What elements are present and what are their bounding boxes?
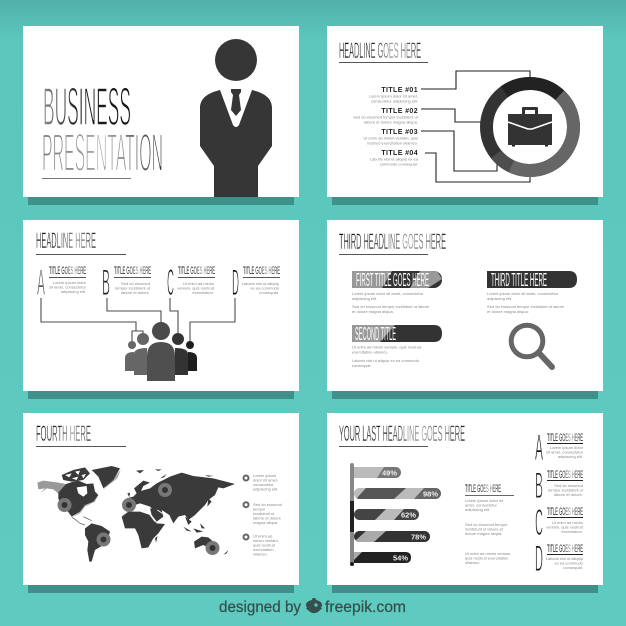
legend item 2: tempor — [253, 506, 266, 512]
connector lines — [421, 71, 530, 182]
title block 4: commodo consequat. — [380, 162, 418, 166]
title block 4: Laboris nisi ut aliquip ex ea — [370, 156, 419, 162]
legend item 2: magna aliqua. — [253, 520, 278, 525]
center text block: quis nostrud exercitation — [465, 556, 508, 560]
item C: Ut enim ad minim — [183, 281, 215, 286]
text: second title body: exercitation ullamco. — [352, 350, 388, 354]
footer credit — [219, 598, 406, 616]
donut chart — [486, 83, 574, 170]
panel: third headline — [327, 220, 603, 399]
bar 49%: 49% — [382, 468, 397, 478]
title block 1: consectetur adipiscing elit. — [371, 98, 418, 104]
right item A: sit amet, consectetur — [546, 450, 584, 454]
panel: headline team: TITLE GOES HERE — [178, 265, 215, 277]
label: second title — [352, 324, 442, 344]
title block 1: Lorem ipsum dolor sit amet, — [369, 94, 418, 98]
right item C: veniam, quis nostrud — [546, 524, 583, 530]
axis — [350, 463, 354, 566]
legend item 1: consectetur — [253, 482, 274, 487]
title block 3 — [363, 129, 418, 146]
center text block — [465, 483, 514, 565]
item D: D — [232, 262, 239, 303]
panel: headline donut — [327, 26, 603, 205]
panel: fourth map: FOURTH HERE — [36, 421, 91, 446]
right item D: Laboris nisi ut aliquip — [546, 556, 584, 561]
text: third title body: et dolore magna aliqua. — [487, 309, 529, 314]
title block 2 — [353, 108, 419, 124]
icon: briefcase — [508, 107, 552, 146]
bar 98%: 98% — [423, 490, 438, 498]
panel: fourth map — [23, 413, 299, 593]
right item B: B — [535, 465, 543, 506]
title block 2: labore et dolore magna aliqua. — [364, 120, 418, 124]
item B: Sed do eiusmod — [121, 281, 150, 286]
bar 54%: 54% — [393, 554, 408, 562]
icon: freepik logo — [306, 598, 322, 613]
legend item 3: Ut enim ad — [253, 534, 272, 538]
right item D: D — [535, 538, 543, 579]
legend item 2: incididunt ut — [253, 511, 275, 516]
item B: B — [102, 262, 110, 303]
center text block: Lorem ipsum dolor sit — [465, 498, 504, 503]
right item D — [535, 538, 584, 579]
panel: business presentation cover: BUSINESS — [43, 77, 131, 137]
legend item 2 — [244, 502, 282, 525]
center text block: adipiscing elit. — [465, 507, 490, 512]
title block 3: nostrud exercitation ullamco. — [367, 140, 418, 146]
title block 1: TITLE #01 — [381, 87, 418, 94]
item B — [102, 262, 151, 303]
title block 4 — [370, 150, 419, 166]
text: second title body: Ut enim ad minim veniam, quis nostrud — [352, 344, 421, 350]
title block 4: TITLE #04 — [381, 150, 418, 157]
connector lines — [41, 298, 235, 341]
panel: headline team — [23, 220, 299, 399]
right item C: C — [535, 502, 543, 543]
right item A: Lorem ipsum dolor — [550, 445, 584, 450]
text: second title body: Laboris nisi ut aliquip ex ea commodo — [352, 358, 420, 363]
item D — [232, 262, 280, 303]
icon: magnifier — [511, 325, 552, 367]
center text block: ullamco. — [465, 560, 480, 565]
item C — [167, 262, 215, 303]
panel: third headline: FIRST TITLE GOES HERE — [356, 270, 429, 290]
text: third title body: Lorem ipsum dolor sit amet, consectetur — [487, 291, 559, 296]
text: first title body: adipiscing elit. — [352, 296, 377, 301]
center text block: amet, consectetur — [465, 502, 497, 508]
text: second title body — [352, 344, 421, 368]
right item B: tempor incididunt ut — [548, 488, 584, 492]
title block 1 — [369, 87, 418, 104]
legend item 1: dolor sit amet, — [253, 478, 278, 482]
item A: Lorem ipsum dolor — [53, 280, 87, 285]
item C: veniam, quis nostrud — [177, 286, 214, 290]
panel: business presentation cover — [23, 26, 299, 205]
legend item 2: labore et dolore — [253, 516, 282, 520]
center text block: dolore magna aliqua. — [465, 531, 502, 536]
panel: headline team: TITLE GOES HERE — [114, 265, 151, 277]
text: third title body — [487, 291, 565, 314]
right item A: A — [535, 427, 543, 468]
panel: headline team: HEADLINE HERE — [36, 228, 96, 253]
legend item 1: Lorem ipsum — [253, 473, 277, 478]
legend item 3: quis nostrud — [253, 542, 275, 548]
legend item 1 — [244, 473, 278, 492]
footer credit: freepik.com — [325, 599, 406, 616]
legend item 3: exercitation — [253, 547, 273, 552]
map markers — [60, 485, 218, 553]
label: second title: SECOND TITLE — [355, 324, 396, 344]
text: second title body: consequat. — [352, 363, 372, 368]
panel: last headline chart — [327, 413, 603, 593]
map: americas — [37, 466, 121, 562]
right item C — [535, 502, 584, 543]
item A: sit amet, consectetur — [49, 284, 87, 290]
right item A — [535, 427, 584, 468]
panel: headline donut: HEADLINE GOES HERE — [339, 38, 421, 63]
text: first title body: Lorem ipsum dolor sit amet, consectetur — [352, 291, 424, 296]
label: first title — [352, 271, 442, 288]
bar 78%: 78% — [411, 532, 426, 542]
right item C: Ut enim ad minim — [552, 520, 584, 525]
text: first title body — [352, 291, 430, 314]
legend item 1: adipiscing elit. — [253, 486, 278, 492]
legend item 2: Sed do eiusmod — [253, 502, 282, 507]
text: first title body: et dolore magna aliqua. — [352, 309, 394, 314]
item A: adipiscing elit. — [61, 289, 86, 294]
panel: business presentation cover: PRESENTATION — [42, 123, 163, 183]
title block 2: Sed do eiusmod tempor incididunt ut — [353, 114, 419, 120]
right item D: consequat. — [563, 565, 583, 570]
center text block: Sed do eiusmod tempor — [465, 522, 508, 527]
legend item 3: ullamco. — [253, 552, 268, 556]
legend item 3: minim veniam, — [253, 538, 279, 543]
bar chart — [350, 463, 442, 566]
panel: last headline chart: TITLE GOES HERE — [465, 483, 501, 495]
right item B: labore et dolore. — [554, 492, 583, 497]
map: eurasia africa australia — [122, 469, 235, 555]
text: first title body: Sed do eiusmod tempor incididunt ut labore — [352, 304, 430, 309]
item B: labore et dolore. — [121, 290, 150, 295]
item C: exercitation. — [192, 290, 214, 295]
panel: headline team: TITLE GOES HERE — [49, 265, 86, 277]
title block 3: Ut enim ad minim veniam, quis — [363, 136, 418, 140]
item A: A — [37, 262, 45, 303]
right item B — [535, 465, 584, 506]
legend item 3 — [244, 534, 279, 556]
item A — [37, 262, 87, 303]
icon: team of people — [125, 322, 197, 381]
item D: ex ea commodo — [251, 286, 280, 290]
right item B: Sed do eiusmod — [554, 483, 583, 488]
label: third title — [487, 270, 577, 290]
item C: C — [167, 262, 174, 303]
item B: tempor incididunt ut — [115, 286, 151, 290]
center text block: Ut enim ad minim veniam, — [465, 551, 511, 556]
bar 62%: 62% — [401, 510, 416, 520]
footer credit: designed by — [219, 599, 301, 616]
panel: headline team: TITLE GOES HERE — [243, 265, 280, 277]
icon: businessman — [200, 39, 272, 197]
item D: consequat. — [259, 290, 279, 295]
center text block: incididunt ut labore et — [465, 526, 504, 532]
item D: Laboris nisi ut aliquip — [242, 281, 280, 286]
title block 2: TITLE #02 — [381, 108, 418, 115]
title block 3: TITLE #03 — [381, 129, 418, 136]
world map — [37, 466, 235, 562]
text: third title body: adipiscing elit. — [487, 296, 512, 301]
right item D: ex ea commodo — [555, 560, 584, 566]
right item A: adipiscing elit. — [558, 454, 583, 459]
text: third title body: Sed do eiusmod tempor incididunt ut labore — [487, 304, 565, 309]
right item C: exercitation. — [561, 529, 583, 534]
